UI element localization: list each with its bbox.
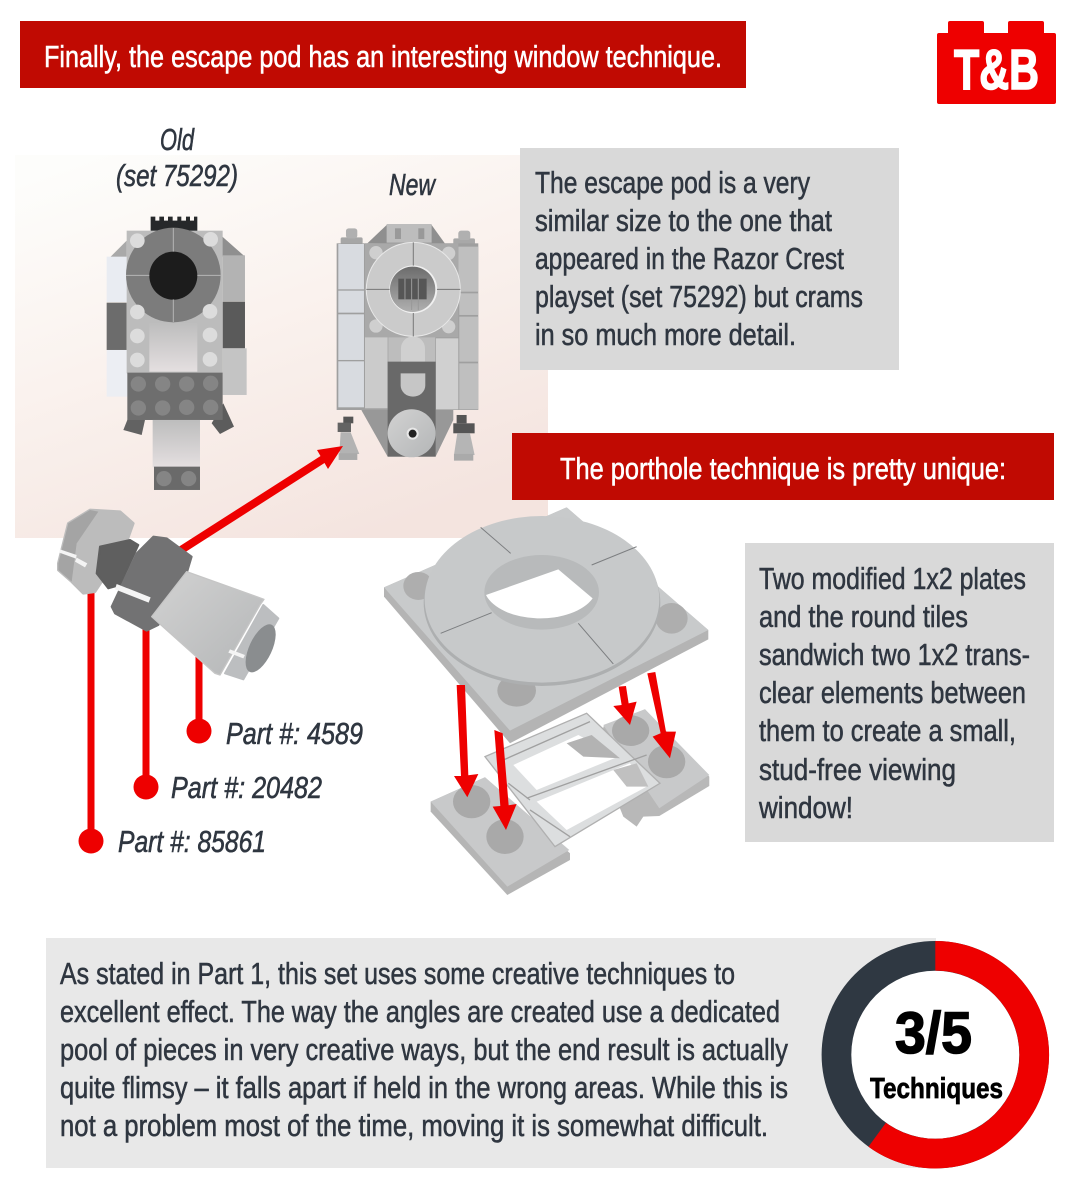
text box: size comparison: appeared in the Razor Crest	[535, 241, 844, 276]
part number labels: Part #: 4589	[226, 716, 363, 751]
donut score: 3/5 techniques	[822, 941, 1049, 1168]
old pod caption: (set 75292)	[116, 158, 238, 193]
text box: how the window works: and the round tiles	[759, 599, 968, 634]
red assembly arrows	[454, 672, 676, 830]
text box: how the window works	[745, 543, 1054, 842]
logo: T&B brick: T&B	[954, 38, 1039, 102]
top plate and ring	[384, 507, 708, 743]
header banner: Finally, the escape pod has an interesting window technique.	[44, 39, 722, 74]
text box: how the window works: stud-free viewing	[759, 752, 956, 787]
leader line and dot: part 85861	[78, 590, 104, 854]
old pod model	[107, 217, 247, 490]
arrow: thruster part to new pod	[178, 446, 343, 552]
part number labels	[118, 716, 363, 859]
summary text panel: pool of pieces in very creative ways, but the end result is actually	[60, 1032, 788, 1067]
new pod caption: New	[389, 167, 437, 202]
new pod model	[337, 224, 478, 461]
text box: size comparison: in so much more detail.	[535, 317, 796, 352]
exploded porthole illustration	[384, 507, 709, 895]
summary text panel: quite flimsy – it falls apart if held in the wrong areas. While this is	[60, 1070, 788, 1105]
summary text panel	[46, 938, 936, 1168]
summary text panel: excellent effect. The way the angles are created use a dedicated	[60, 994, 780, 1029]
thruster part illustration	[58, 510, 282, 679]
logo: T&B brick	[937, 21, 1056, 104]
text box: size comparison	[520, 148, 899, 370]
part number labels: Part #: 85861	[118, 824, 266, 859]
text box: size comparison: playset (set 75292) but crams	[535, 279, 863, 314]
text box: size comparison: similar size to the one that	[535, 203, 832, 238]
donut score: 3/5 techniques: Techniques	[870, 1073, 1003, 1105]
summary text panel: not a problem most of the time, moving it is somewhat difficult.	[60, 1108, 768, 1143]
photo of old and new escape pods	[15, 155, 548, 538]
part number labels: Part #: 20482	[171, 770, 322, 805]
text box: how the window works: them to create a small,	[759, 713, 1016, 748]
heading banner: porthole technique	[512, 433, 1054, 500]
leader line and dot: part 20482	[134, 625, 158, 800]
old pod caption	[116, 122, 238, 193]
summary text panel: As stated in Part 1, this set uses some creative techniques to	[60, 956, 735, 991]
old pod caption: Old	[160, 122, 195, 157]
clear tiles	[485, 713, 660, 847]
lower plates	[431, 709, 709, 895]
leader line and dot: part 4589	[186, 650, 212, 744]
text box: size comparison: The escape pod is a very	[535, 165, 810, 200]
text box: how the window works: clear elements between	[759, 675, 1026, 710]
header banner	[20, 21, 746, 88]
text box: how the window works: window!	[758, 790, 853, 825]
donut score: 3/5 techniques: 3/5	[895, 1001, 972, 1066]
